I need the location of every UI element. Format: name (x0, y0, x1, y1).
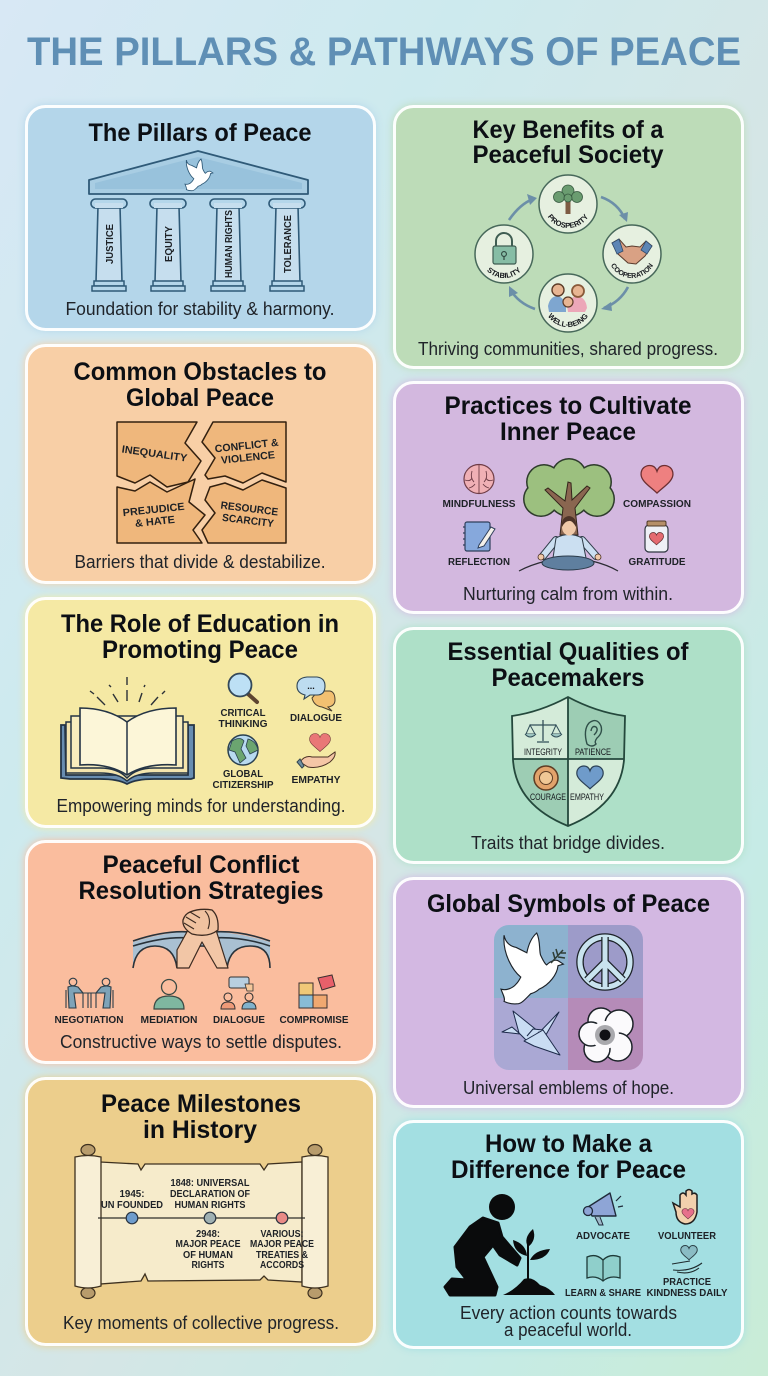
heading: pillars: The Pillars of Peace (88, 119, 312, 147)
grid of peace symbols (494, 925, 643, 1070)
heading: qualities: Peacemakers (492, 664, 644, 692)
heading: difference: Difference for Peace (451, 1156, 686, 1184)
strategy: dialogue: DIALOGUE (213, 1014, 265, 1026)
strategy: dialogue (213, 977, 265, 1026)
topic: empathy (292, 734, 340, 786)
icon: white poppy (579, 1008, 633, 1062)
heading: qualities: Essential Qualities of (448, 638, 689, 666)
caption: difference: Every action counts towards (460, 1303, 677, 1323)
benefit: well-being (538, 273, 598, 333)
topic: empathy: EMPATHY (292, 774, 340, 786)
topic: critical thinking: CRITICAL (220, 707, 266, 719)
practice: reflection: REFLECTION (448, 556, 510, 568)
benefit: stability: STABILITY (487, 266, 520, 278)
pillar: tolerance: TOLERANCE (282, 215, 294, 273)
action: practice kindness daily (646, 1246, 728, 1299)
piece: prejudice and hate: PREJUDICE (122, 501, 185, 519)
action: practice kindness daily: PRACTICE (663, 1276, 711, 1288)
benefit: stability (474, 224, 534, 284)
practice: reflection (448, 522, 510, 568)
milestone: various: ACCORDS (260, 1259, 304, 1271)
heading: inner peace: Inner Peace (500, 418, 636, 446)
panel: key benefits (389, 101, 748, 372)
benefit: prosperity (538, 174, 598, 234)
practice: compassion: COMPASSION (623, 498, 691, 510)
caption: education: Empowering minds for understanding. (56, 796, 346, 816)
icon: peace sign (580, 937, 630, 987)
piece: prejudice and hate: & HATE (134, 514, 175, 530)
panel: peace milestones (26, 1078, 374, 1344)
milestone: 2948: OF HUMAN (183, 1249, 233, 1261)
heading: benefits: Peaceful Society (472, 141, 664, 169)
caption: conflict resolution: Constructive ways to settle disputes. (60, 1032, 342, 1052)
benefit: cooperation (602, 224, 662, 284)
heading: milestones: Peace Milestones (101, 1090, 301, 1118)
strategy: mediation: MEDIATION (140, 1014, 198, 1026)
pillar: justice (91, 199, 127, 291)
piece: prejudice and hate (117, 479, 205, 543)
heading: obstacles: Common Obstacles to (74, 358, 326, 386)
benefit: well-being: WELL-BEING (548, 312, 588, 328)
action: volunteer (658, 1190, 716, 1242)
heading: education: The Role of Education in (61, 610, 339, 638)
caption: inner peace: Nurturing calm from within. (463, 584, 673, 604)
panel: essential qualities (394, 628, 742, 862)
milestone: 2948: MAJOR PEACE (176, 1238, 240, 1250)
pillar: human rights (210, 199, 246, 291)
cycle arrows (509, 194, 628, 311)
cracked puzzle of barriers (117, 422, 286, 543)
heading: conflict resolution: Peaceful Conflict (102, 851, 300, 879)
pillar: justice: JUSTICE (104, 224, 116, 264)
pillar: tolerance (269, 199, 305, 291)
practice: mindfulness: MINDFULNESS (442, 498, 516, 510)
heading: inner peace: Practices to Cultivate (444, 392, 692, 420)
milestone: various (250, 1212, 314, 1271)
panel: conflict resolution (26, 842, 374, 1062)
topic: global citizenship: GLOBAL (223, 768, 264, 780)
piece: conflict and violence: CONFLICT & (214, 437, 280, 455)
strategy: negotiation: NEGOTIATION (54, 1014, 124, 1026)
piece: inequality: INEQUALITY (121, 443, 188, 465)
heading: obstacles: Global Peace (126, 384, 274, 412)
piece: conflict and violence: VIOLENCE (220, 449, 275, 467)
quality: courage: COURAGE (530, 792, 566, 803)
panel: make a difference (394, 1122, 742, 1348)
milestone: 1948 declaration (170, 1177, 250, 1224)
illustration: clasped hands over bridge (133, 909, 270, 968)
icon: open book with light rays (61, 677, 194, 784)
milestone: 2948: RIGHTS (192, 1259, 224, 1271)
topic: critical thinking (218, 674, 268, 730)
topic: dialogue: DIALOGUE (290, 712, 342, 724)
icon: dove (185, 159, 213, 191)
milestone: various: TREATIES & (256, 1249, 308, 1261)
milestone: various: VARIOUS: (260, 1228, 304, 1240)
heading: benefits: Key Benefits of a (472, 116, 665, 144)
strategy: negotiation (54, 978, 124, 1026)
heading: milestones: in History (143, 1116, 257, 1144)
topic: dialogue: ... (307, 681, 315, 691)
action: learn and share (565, 1256, 641, 1299)
caption: pillars: Foundation for stability & harmony. (66, 299, 334, 319)
milestone: various: MAJOR PEACE (250, 1238, 314, 1250)
panel: inner peace (394, 382, 742, 612)
heading: conflict resolution: Resolution Strategies (78, 877, 324, 905)
piece: conflict and violence (202, 422, 286, 483)
pediment with dove (89, 151, 308, 194)
action: practice kindness daily: KINDNESS DAILY (646, 1287, 728, 1299)
quality: empathy: EMPATHY (570, 792, 605, 803)
milestone: 2948: 2948: (196, 1228, 220, 1240)
milestone: 2948 (176, 1228, 240, 1271)
panel: common obstacles (26, 346, 374, 582)
milestone: 1948 declaration: HUMAN RIGHTS (174, 1199, 246, 1211)
illustration: person planting seedling (445, 1194, 555, 1295)
piece: inequality (117, 422, 201, 487)
benefit: cooperation: COOPERATION (612, 263, 653, 278)
action: advocate (576, 1193, 630, 1242)
strategy: compromise: COMPROMISE (280, 1014, 348, 1026)
panel: role of education (26, 598, 374, 826)
piece: resource scarcity: SCARCITY (221, 512, 274, 530)
heading: symbols: Global Symbols of Peace (427, 890, 710, 918)
icon: dove with olive branch (501, 933, 566, 1004)
benefit: prosperity: PROSPERITY (548, 214, 588, 228)
piece: resource scarcity (202, 480, 286, 543)
shield of qualities (512, 697, 625, 826)
pillar: equity: EQUITY (163, 226, 175, 262)
milestone: 1948 declaration: DECLARATION OF (170, 1188, 250, 1200)
quality: patience: PATIENCE (575, 747, 611, 758)
caption: qualities: Traits that bridge divides. (471, 833, 665, 853)
milestone: 1945: 1945: (120, 1188, 144, 1200)
strategy: compromise (280, 975, 348, 1026)
heading: difference: How to Make a (485, 1130, 653, 1158)
title: THE PILLARS & PATHWAYS OF PEACE (27, 30, 741, 74)
caption: difference: a peaceful world. (504, 1320, 632, 1340)
topic: critical thinking: THINKING (218, 718, 268, 730)
caption: milestones: Key moments of collective progress. (63, 1313, 339, 1333)
practice: gratitude: GRATITUDE (628, 556, 686, 568)
action: advocate: ADVOCATE (576, 1230, 630, 1242)
pillar: human rights: HUMAN RIGHTS (223, 210, 235, 278)
panel: global symbols (394, 878, 742, 1106)
practice: mindfulness (442, 464, 516, 510)
topic: global citizenship (212, 735, 274, 791)
practice: gratitude (628, 521, 686, 568)
action: volunteer: VOLUNTEER (658, 1230, 716, 1242)
milestone: 1945 (101, 1188, 163, 1224)
illustration: meditating person under tree (519, 458, 618, 571)
scroll timeline (75, 1144, 328, 1298)
topic: dialogue (290, 677, 342, 724)
quality: integrity: INTEGRITY (524, 747, 562, 758)
action: learn and share: LEARN & SHARE (565, 1287, 641, 1299)
caption: benefits: Thriving communities, shared progress. (418, 339, 718, 359)
panel: the pillars of peace (26, 106, 374, 330)
pillar: equity (150, 199, 186, 291)
caption: symbols: Universal emblems of hope. (463, 1078, 674, 1098)
heading: education: Promoting Peace (102, 636, 298, 664)
icon: origami crane (502, 1011, 560, 1055)
piece: resource scarcity: RESOURCE (220, 500, 279, 519)
milestone: 1948 declaration: 1848: UNIVERSAL (170, 1177, 250, 1189)
milestone: 1945: UN FOUNDED (101, 1199, 163, 1211)
practice: compassion (623, 466, 691, 510)
topic: global citizenship: CITIZERSHIP (212, 779, 274, 791)
caption: obstacles: Barriers that divide & destabilize. (74, 552, 326, 572)
strategy: mediation (140, 980, 198, 1026)
